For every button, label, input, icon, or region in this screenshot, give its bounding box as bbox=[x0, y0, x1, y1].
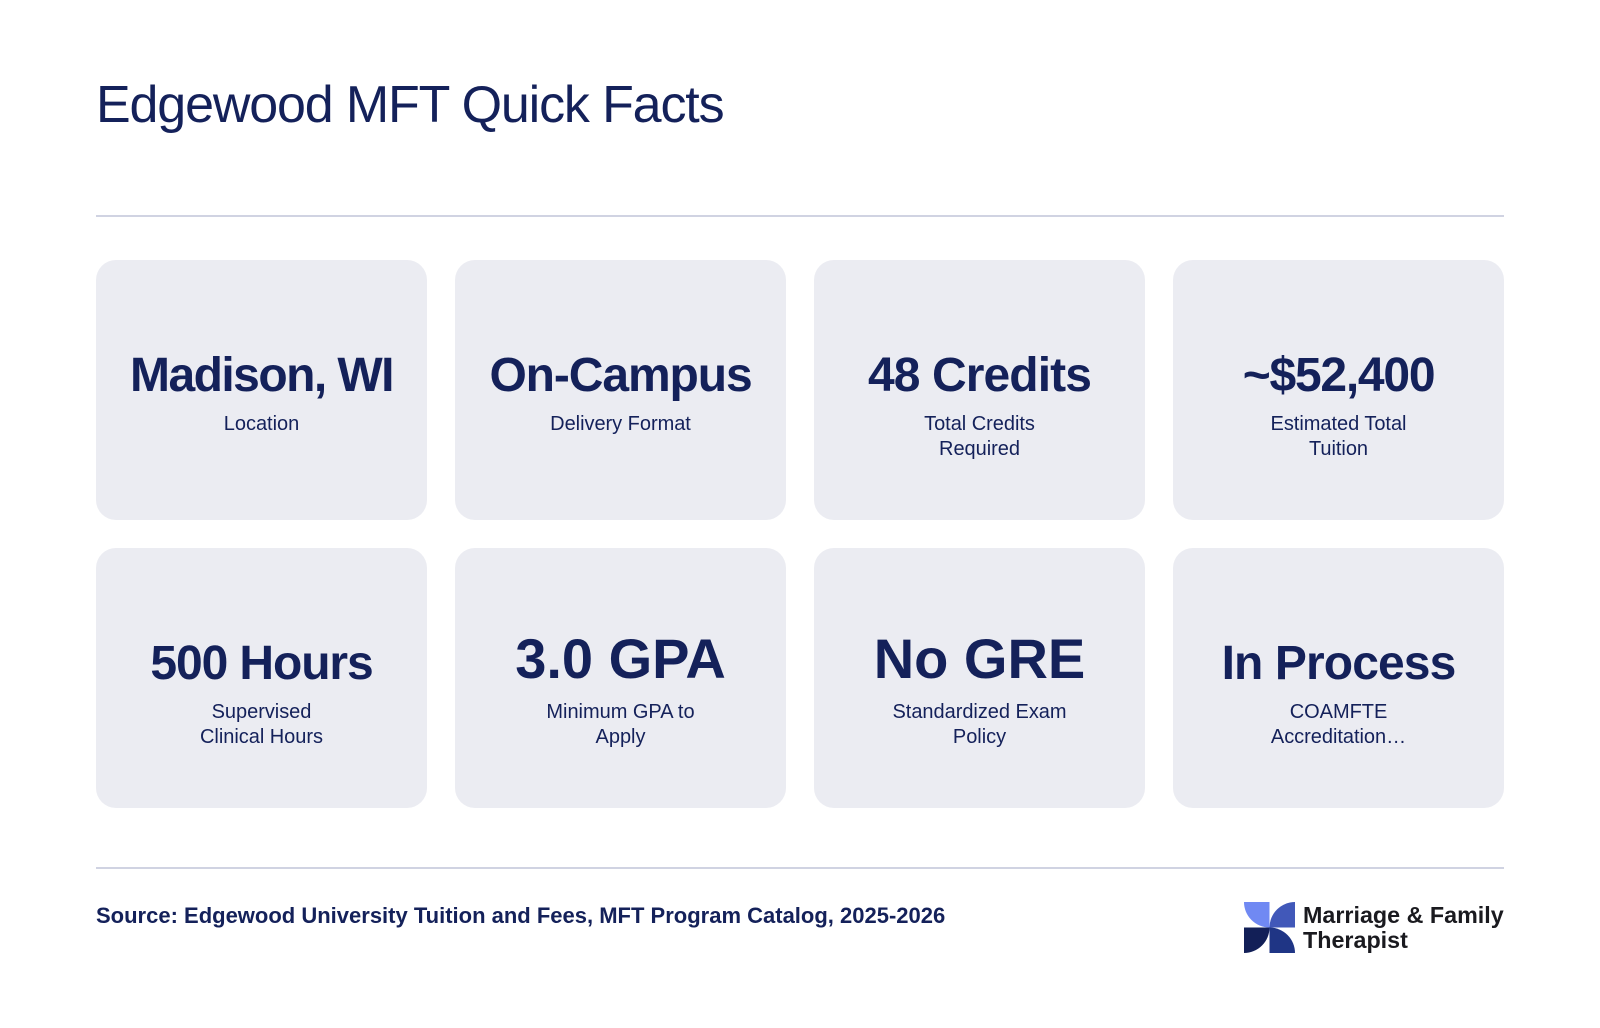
label: accreditation bbox=[1271, 701, 1406, 748]
label: minimum GPA: Minimum GPA to bbox=[546, 701, 695, 723]
label: estimated tuition: Estimated Total bbox=[1271, 413, 1406, 435]
label: accreditation: COAMFTE bbox=[1290, 701, 1387, 723]
card: minimum GPA bbox=[455, 548, 786, 808]
value: total credits: 48 Credits bbox=[868, 349, 1091, 402]
label: clinical hours: Clinical Hours bbox=[200, 726, 323, 748]
value: location: Madison, WI bbox=[130, 349, 393, 402]
label: clinical hours: Supervised bbox=[212, 701, 311, 723]
label: exam policy: Policy bbox=[953, 726, 1006, 748]
card: estimated tuition bbox=[1173, 260, 1504, 520]
value: accreditation: In Process bbox=[1222, 637, 1455, 690]
label: accreditation: Accreditation… bbox=[1271, 726, 1406, 748]
value: clinical hours: 500 Hours bbox=[150, 637, 373, 690]
brand name bbox=[1303, 902, 1504, 953]
card: exam policy bbox=[814, 548, 1145, 808]
label: estimated tuition bbox=[1271, 413, 1406, 460]
label: minimum GPA bbox=[546, 701, 695, 748]
label: delivery format: Delivery Format bbox=[550, 413, 691, 435]
value: delivery format: On-Campus bbox=[489, 349, 752, 402]
label: exam policy bbox=[892, 701, 1067, 748]
label: total credits: Required bbox=[939, 438, 1020, 460]
label: clinical hours bbox=[200, 701, 323, 748]
label: location: Location bbox=[224, 413, 299, 435]
value: estimated tuition: ~$52,400 bbox=[1243, 349, 1434, 402]
card: clinical hours bbox=[96, 548, 427, 808]
card: location bbox=[96, 260, 427, 520]
label: total credits bbox=[924, 413, 1035, 460]
label: exam policy: Standardized Exam bbox=[892, 701, 1067, 723]
icon: brand logo bbox=[1244, 902, 1295, 953]
card: accreditation bbox=[1173, 548, 1504, 808]
value: exam policy: No GRE bbox=[874, 627, 1085, 690]
brand name: Therapist bbox=[1303, 926, 1408, 952]
label: total credits: Total Credits bbox=[924, 413, 1035, 435]
value: minimum GPA: 3.0 GPA bbox=[515, 627, 726, 690]
label: estimated tuition: Tuition bbox=[1309, 438, 1368, 460]
title: Edgewood MFT Quick Facts bbox=[96, 76, 723, 134]
card: total credits bbox=[814, 260, 1145, 520]
label: minimum GPA: Apply bbox=[596, 726, 645, 748]
brand name: Marriage & Family bbox=[1303, 902, 1504, 928]
card: delivery format bbox=[455, 260, 786, 520]
source note: Source: Edgewood University Tuition and Fees, MFT Program Catalog, 2025-2026 bbox=[96, 903, 945, 928]
